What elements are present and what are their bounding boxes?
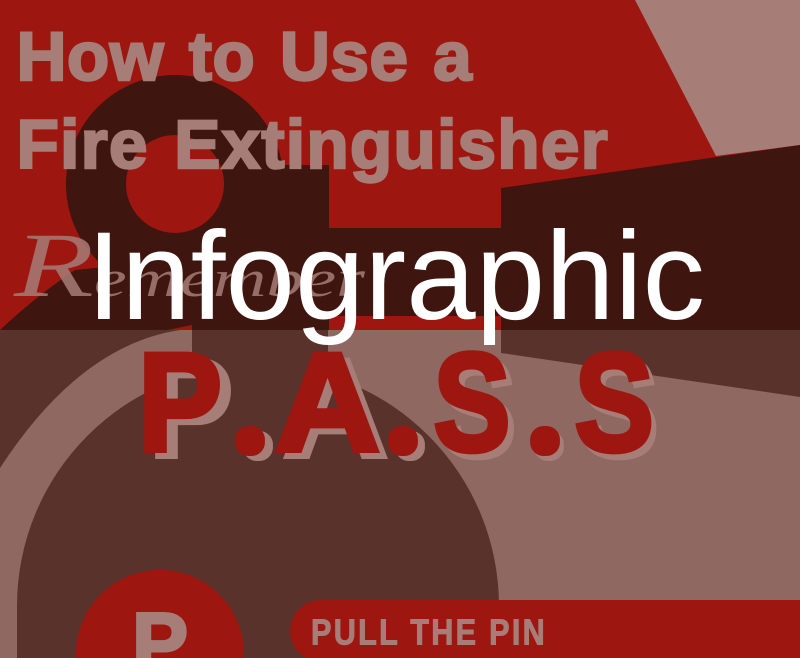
heading: P.A.S.S: . <box>542 426 548 448</box>
heading shadow: P.A.S.S: . <box>255 430 261 452</box>
title: Fire Extinguisher <box>17 106 608 183</box>
heading shadow: P.A.S.S: P <box>149 330 233 487</box>
step banner: pull the pin <box>290 600 800 658</box>
heading: P.A.S.S: . <box>400 426 406 448</box>
mauve arc band <box>0 330 192 658</box>
panel: brown lower background <box>0 330 800 658</box>
step banner: pull the pin: PULL THE PIN <box>311 613 545 653</box>
dark extinguisher body <box>0 145 800 330</box>
mauve right background <box>328 330 800 658</box>
heading: P.A.S.S: A <box>275 325 380 481</box>
heading: P.A.S.S: S <box>574 323 654 481</box>
heading: P.A.S.S: S <box>434 325 510 481</box>
heading shadow: P.A.S.S: . <box>546 430 552 452</box>
heading shadow: P.A.S.S <box>149 329 659 487</box>
heading shadow: P.A.S.S: A <box>283 331 388 487</box>
step badge: P <box>76 570 244 658</box>
heading shadow: P.A.S.S: S <box>580 329 659 487</box>
watermark: Infographic: Infographic <box>86 207 705 346</box>
heading: P.A.S.S: . <box>247 426 253 448</box>
heading shadow: P.A.S.S: . <box>407 430 413 452</box>
title <box>17 18 608 183</box>
heading: P.A.S.S <box>138 323 654 481</box>
title: How to Use a <box>17 18 472 95</box>
dark extinguisher ring <box>96 105 254 263</box>
pale corner wedge <box>635 0 800 156</box>
script heading: Remember: R emember <box>13 214 366 316</box>
heading: P.A.S.S: P <box>138 324 222 481</box>
panel: red upper background <box>0 0 800 330</box>
brown dome <box>17 365 499 658</box>
heading shadow: P.A.S.S: S <box>440 331 516 487</box>
